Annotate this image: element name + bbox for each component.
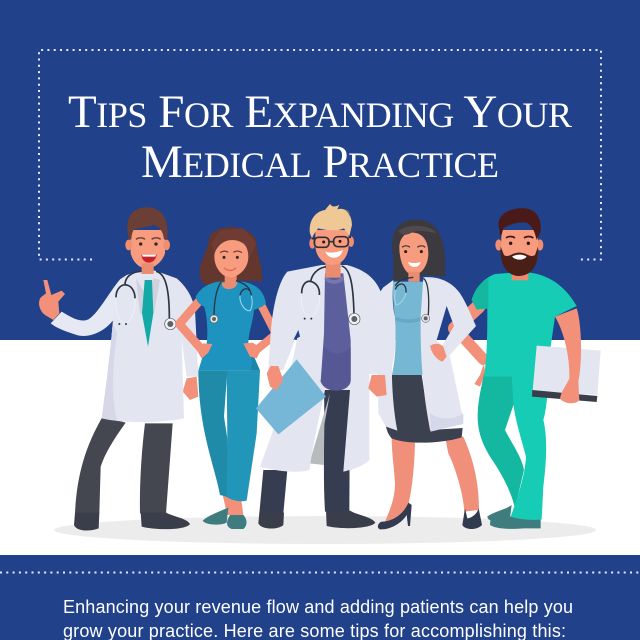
top blue background panel: [0, 0, 640, 340]
floor shadow: [54, 516, 596, 544]
intro text: [63, 597, 573, 640]
title: MEDICAL PRACTICE: [141, 136, 499, 188]
dotted title frame: [39, 50, 601, 260]
bottom blue intro panel: [0, 555, 640, 640]
section divider dots: [0, 572, 640, 574]
title: TIPS FOR EXPANDING YOUR: [68, 86, 572, 138]
figure: female nurse in blue scrubs: [179, 227, 276, 529]
title: [68, 86, 572, 188]
figure: male doctor with teal tie: [39, 207, 198, 531]
figure: male nurse in green scrubs with folder: [455, 208, 601, 529]
intro text: Enhancing your revenue flow and adding patients can help you: [63, 597, 573, 617]
figure: female doctor with dark skirt: [377, 219, 482, 529]
figure: blond doctor with glasses and clipboard: [256, 204, 388, 529]
